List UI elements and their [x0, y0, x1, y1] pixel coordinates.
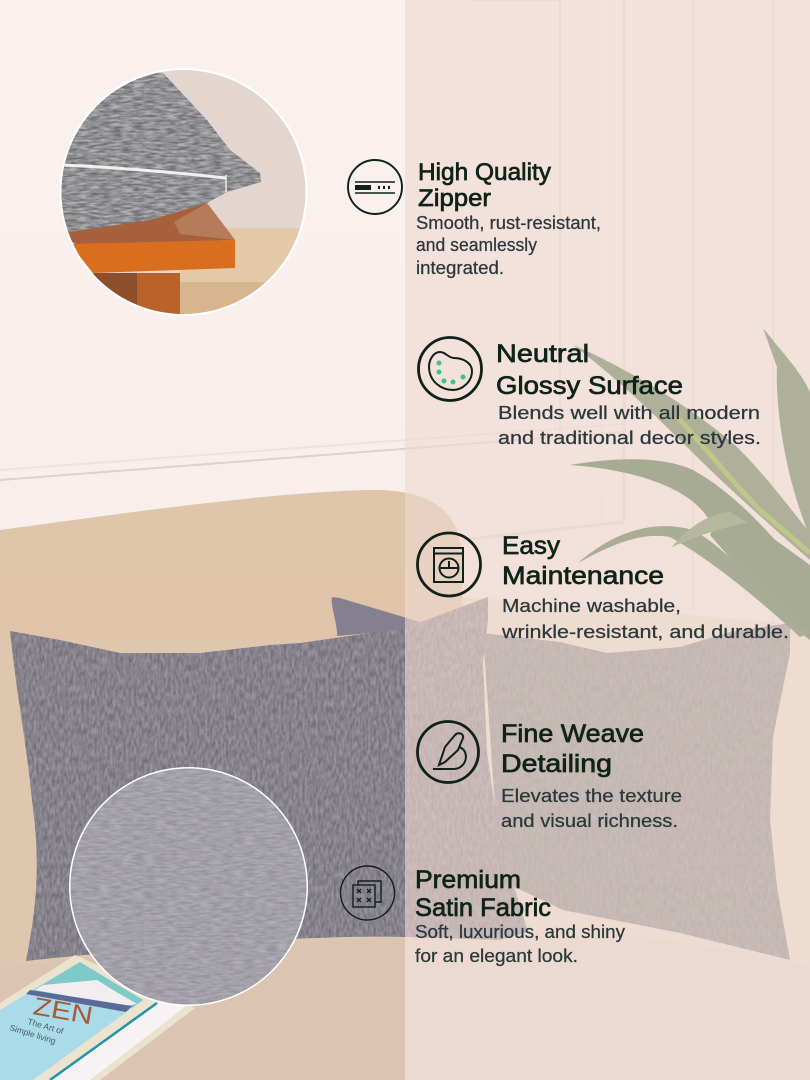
feature: fine weave detailing: Fine Weave [501, 720, 644, 748]
feature: fine weave detailing: Elevates the texture [501, 785, 682, 806]
feature: high quality zipper: High Quality [418, 159, 551, 186]
feature: high quality zipper: and seamlessly [416, 234, 538, 255]
feature: high quality zipper: Zipper [418, 185, 491, 212]
zoom circle: pillow corner on wooden table [60, 68, 308, 316]
feature: easy maintenance: Machine washable, [502, 595, 681, 616]
book: Zen: The Art of [26, 1016, 65, 1036]
feature: neutral glossy surface: Neutral [496, 340, 589, 368]
feature: high quality zipper: Smooth, rust-resistant, [416, 212, 601, 233]
feature: premium satin fabric [340, 866, 626, 966]
feature: premium satin fabric: for an elegant look. [415, 945, 578, 966]
feature: premium satin fabric: Satin Fabric [415, 894, 551, 922]
book: Zen: Simple living [8, 1022, 57, 1046]
plant leaves [570, 328, 810, 640]
sofa [0, 490, 810, 1080]
feature: high quality zipper: integrated. [416, 257, 504, 278]
feature: fine weave detailing: and visual richness. [501, 810, 678, 831]
icon: palette [418, 338, 482, 400]
icon: zipper [348, 160, 402, 214]
feature: easy maintenance: Easy [502, 532, 561, 560]
feature: high quality zipper [348, 159, 601, 278]
feature: premium satin fabric: Soft, luxurious, and shiny [415, 921, 626, 942]
zoom circle: fabric close-up [69, 767, 308, 1006]
back pillow [332, 597, 800, 970]
icon: washing machine [418, 533, 480, 596]
book: Zen: ZEN [31, 992, 95, 1030]
feature: fine weave detailing [418, 720, 682, 831]
feature: neutral glossy surface: Blends well with all modern [498, 402, 760, 423]
icon: fabric swatch [340, 866, 394, 920]
front pillow [0, 590, 535, 970]
feature: neutral glossy surface [418, 338, 761, 448]
wall moulding [0, 0, 773, 625]
book: Zen [0, 955, 195, 1080]
translucent right panel [405, 0, 810, 1080]
feature: neutral glossy surface: Glossy Surface [496, 372, 683, 400]
feature: easy maintenance: Maintenance [502, 562, 664, 590]
feature: easy maintenance [418, 532, 789, 642]
feature: neutral glossy surface: and traditional decor styles. [498, 427, 761, 448]
feature: fine weave detailing: Detailing [501, 750, 612, 778]
feature: premium satin fabric: Premium [415, 866, 521, 894]
feature: easy maintenance: wrinkle-resistant, and durable. [501, 621, 789, 642]
icon: pen nib [418, 722, 478, 782]
